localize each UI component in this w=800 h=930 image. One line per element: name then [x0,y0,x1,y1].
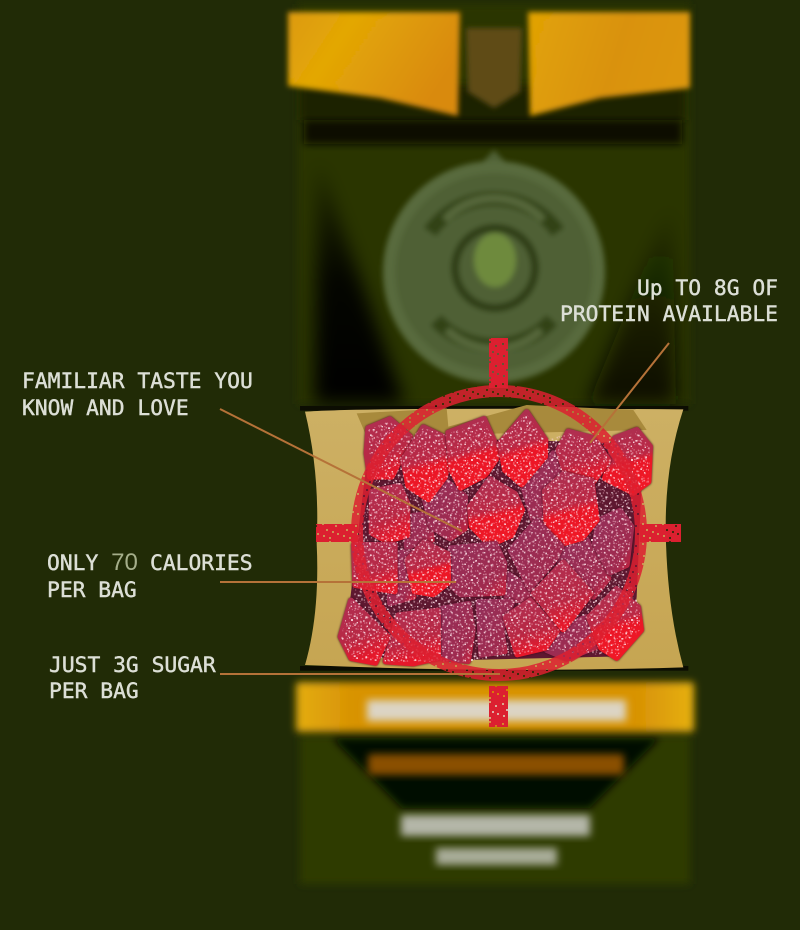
callout: sugar: PER BAG [49,679,139,704]
blurred white line one [401,815,590,836]
gummies [341,412,650,663]
target reticle [316,338,681,727]
sugar speckle [341,414,650,662]
bottom edge [300,666,688,671]
callout: calories: ONLY [47,551,111,576]
leader lines [220,343,669,674]
crosshair left [316,524,358,542]
callout: calories: PER BAG [47,578,137,603]
dark panel left of emblem [314,160,405,404]
crosshair top [489,338,508,388]
lower bag [296,682,694,884]
reticle ring [357,391,641,675]
emblem [389,150,599,377]
callout: protein: Up TO 8G OF [637,276,778,301]
open bag window with gummies [300,405,688,671]
blurred band label [367,700,626,721]
line: protein [590,343,669,443]
callout: calories: CALORIES [150,551,253,576]
dark band under header [304,120,682,144]
callout: calories: 70 [111,549,138,576]
crosshair right [640,524,681,542]
dark panel right of emblem [588,200,676,404]
callout: sugar: JUST 3G SUGAR [49,653,216,678]
line: familiar taste [220,409,462,531]
bag body [298,4,690,404]
shade under banners [300,85,685,120]
gold banner left [288,12,460,116]
kraft paper pouch [305,409,683,670]
blurred white line two [436,848,557,865]
gummy backing shadow [347,437,643,660]
callout: familiar taste: FAMILIAR TASTE YOU [22,369,253,394]
line: sugar [220,673,500,675]
center badge [466,28,522,108]
gold band [296,682,694,732]
blurred product bag [288,4,690,404]
top edge [300,406,688,411]
callout: familiar taste: KNOW AND LOVE [22,396,189,421]
crosshair bottom [489,686,508,727]
callout: protein: PROTEIN AVAILABLE [560,302,778,327]
gold banner right [528,12,690,116]
blurred orange subtitle [368,754,624,775]
pouch top shadow [357,405,647,437]
lower green panel [300,736,690,884]
line: calories [220,581,456,583]
dark wedge [332,738,660,808]
